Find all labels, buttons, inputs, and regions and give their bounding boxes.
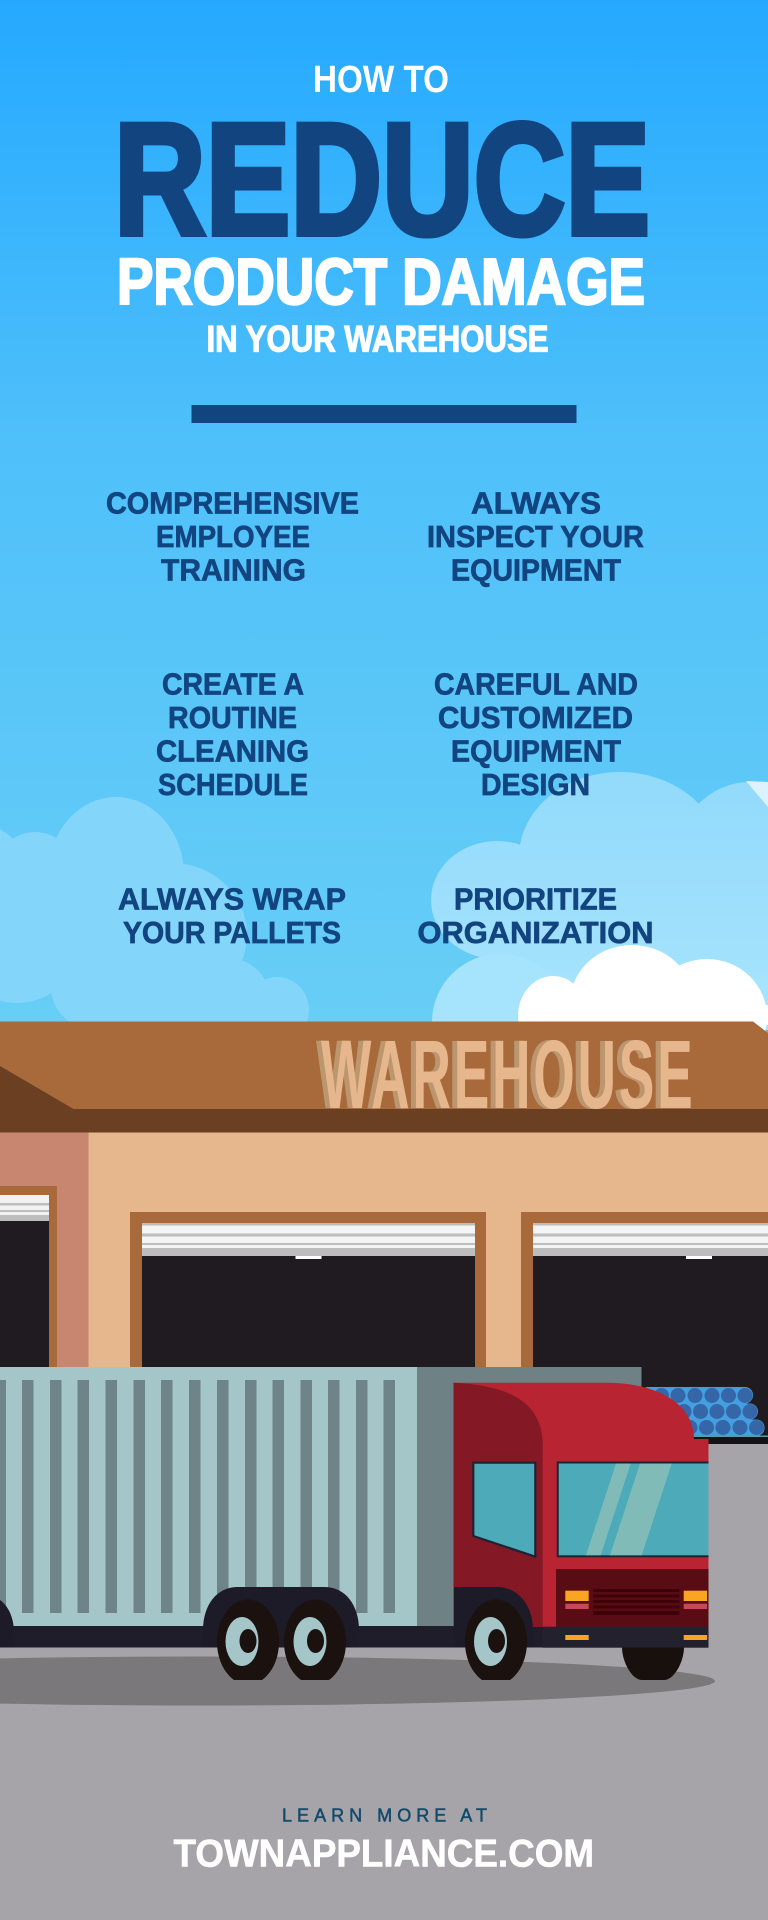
cloud: white front bbox=[518, 945, 768, 1075]
tip: careful and customized equipment design: CAREFUL AND bbox=[434, 668, 638, 702]
ground shadow bbox=[0, 1656, 715, 1706]
cab bbox=[454, 1383, 708, 1627]
tip: create a routine cleaning schedule: CREATE A bbox=[162, 668, 304, 702]
tip: careful and customized equipment design: CUSTOMIZED bbox=[438, 701, 633, 735]
door: right bbox=[521, 1212, 768, 1444]
tip: comprehensive employee training: TRAINING bbox=[161, 554, 306, 588]
tip: comprehensive employee training bbox=[106, 486, 359, 588]
chassis bbox=[0, 1626, 545, 1648]
ground bbox=[0, 1444, 768, 1920]
title: how to: HOW TO bbox=[313, 59, 449, 101]
stacked blue pipes bbox=[640, 1387, 768, 1444]
bumper bbox=[543, 1627, 708, 1648]
cloud: top right sliver bbox=[746, 781, 768, 807]
divider bar bbox=[192, 405, 576, 423]
container ribs bbox=[0, 1380, 395, 1613]
tip: careful and customized equipment design bbox=[434, 668, 638, 802]
footer: website: TOWNAPPLIANCE.COM bbox=[174, 1832, 594, 1876]
roof bbox=[0, 1022, 768, 1132]
cloud: left bbox=[0, 797, 309, 1043]
tip: prioritize organization bbox=[418, 882, 654, 950]
wall: tan front bbox=[88, 1132, 768, 1372]
wheel: front bbox=[465, 1600, 527, 1684]
warehouse building bbox=[0, 1020, 768, 1444]
wheel: rear 1 bbox=[217, 1600, 279, 1684]
rear wheel arch bbox=[203, 1587, 359, 1647]
tip: always inspect your equipment: INSPECT YOUR bbox=[427, 520, 644, 554]
sign: warehouse: WAREHOUSE bbox=[318, 1020, 693, 1129]
rear left wheel arch bbox=[0, 1600, 14, 1647]
tip: always wrap your pallets bbox=[118, 882, 346, 950]
tip: always inspect your equipment: EQUIPMENT bbox=[451, 554, 621, 588]
tip: comprehensive employee training: COMPREHENSIVE bbox=[106, 486, 359, 520]
tip: always inspect your equipment: ALWAYS bbox=[471, 486, 601, 520]
door: centre bbox=[130, 1212, 486, 1372]
wall: pink side bbox=[0, 1132, 88, 1372]
tip: always inspect your equipment bbox=[427, 486, 644, 588]
tip: prioritize organization: ORGANIZATION bbox=[418, 916, 654, 950]
tip: always wrap your pallets: YOUR PALLETS bbox=[123, 916, 341, 950]
title: reduce: REDUCE bbox=[114, 90, 650, 268]
windshield bbox=[557, 1462, 708, 1557]
door: left bbox=[0, 1186, 57, 1372]
cloud: right lower bbox=[432, 954, 768, 1090]
front far wheel bbox=[622, 1647, 684, 1680]
container bbox=[0, 1367, 642, 1626]
tip: prioritize organization: PRIORITIZE bbox=[454, 882, 617, 916]
sign: warehouse: WAREHOUSE bbox=[321, 1020, 695, 1129]
title: product damage: PRODUCT DAMAGE bbox=[117, 246, 645, 318]
tip: create a routine cleaning schedule bbox=[156, 668, 309, 802]
truck bbox=[0, 1367, 708, 1684]
tip: careful and customized equipment design: EQUIPMENT bbox=[451, 734, 621, 768]
sign: warehouse: WAREHOUSE bbox=[316, 1020, 690, 1129]
cloud: right back bbox=[431, 772, 768, 1030]
tip: careful and customized equipment design: DESIGN bbox=[481, 768, 590, 802]
tip: create a routine cleaning schedule: CLEANING bbox=[156, 734, 309, 768]
title: in your warehouse: IN YOUR WAREHOUSE bbox=[206, 318, 548, 360]
tip: always wrap your pallets: ALWAYS WRAP bbox=[118, 882, 346, 916]
front grille panel bbox=[556, 1569, 708, 1627]
wheel: rear 2 bbox=[284, 1600, 346, 1684]
footer: learn more at: LEARN MORE AT bbox=[282, 1806, 487, 1826]
tip: create a routine cleaning schedule: SCHEDULE bbox=[158, 768, 308, 802]
tip: comprehensive employee training: EMPLOYEE bbox=[156, 520, 310, 554]
sky background bbox=[0, 0, 768, 1030]
tip: create a routine cleaning schedule: ROUTINE bbox=[168, 701, 297, 735]
front wheel arch bbox=[454, 1587, 533, 1647]
side window bbox=[473, 1463, 535, 1557]
